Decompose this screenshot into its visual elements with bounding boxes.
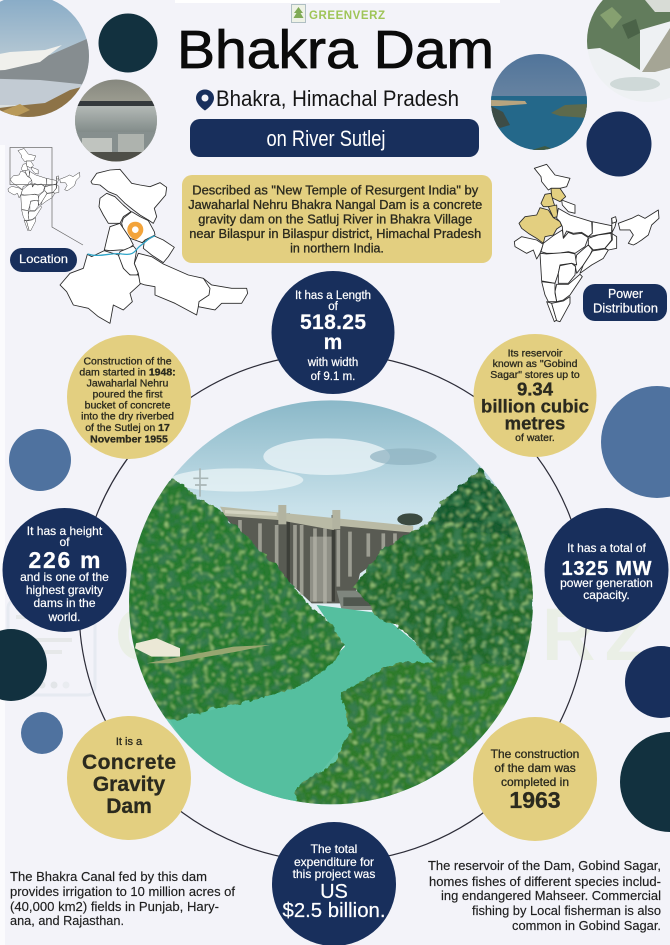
subtitle with location pin: Bhakra, Himachal Pradesh (216, 86, 459, 111)
info circle: dam type: Gravity (93, 773, 166, 796)
info circle: completion year: 1963 (509, 787, 561, 813)
text block: reservoir fishing: ing endangered Mahseer. Commercial (441, 889, 661, 903)
description box (182, 175, 492, 263)
power distribution label: Distribution (593, 302, 658, 316)
info circle: reservoir capacity: billion cubic (481, 396, 589, 416)
info circle: height: world. (47, 610, 81, 624)
info circle: construction start: poured the first (93, 388, 163, 400)
info circle: expenditure: The total (311, 842, 357, 856)
info circle: completion year (473, 717, 597, 841)
description box: gravity dam on the Satluj River in Bhakra Village (198, 212, 472, 226)
text block: reservoir fishing: fishing by Local fisherman is also (472, 904, 661, 918)
location label: Location (19, 252, 68, 266)
power distribution label (583, 284, 667, 321)
info circle: construction start: Construction of the (83, 356, 172, 368)
info circle: reservoir capacity: metres (505, 412, 565, 434)
photo: reservoir top right (491, 54, 587, 154)
photo: spillway water top right (587, 0, 670, 91)
icon: orange map pin (127, 222, 143, 240)
river line (88, 236, 155, 255)
info circle: reservoir capacity: Sagar" stores up to (490, 369, 580, 381)
text block: reservoir fishing: The reservoir of the Dam, Gobind Sagar, (428, 859, 661, 873)
photo: lake and clouds top left (0, 0, 89, 117)
info circle: power capacity: It has a total of (567, 541, 647, 555)
text block: irrigation: provides irrigation to 10 million acres of (10, 885, 236, 899)
info circle: completion year: completed in (501, 775, 569, 789)
description box: in northern India. (290, 242, 384, 256)
info circle: height: dams in the (33, 596, 96, 610)
text block: reservoir fishing: homes fishes of different species includ- (429, 875, 661, 889)
info circle: reservoir capacity (474, 334, 596, 457)
title: Bhakra Dam (177, 20, 494, 80)
info circle: length: m (324, 331, 342, 354)
info circle: height (2, 508, 126, 632)
info circle: power capacity: power generation (560, 576, 653, 590)
info circle: length: with width (307, 357, 358, 369)
info circle: length: 518.25 (300, 311, 366, 334)
watermark (8, 593, 650, 695)
info circle: height: and is one of the (20, 570, 109, 584)
info circle: expenditure: expenditure for (294, 855, 374, 869)
main photo: Bhakra Dam (120, 400, 540, 810)
info circle: height: highest gravity (26, 583, 103, 597)
description box: Jawaharlal Nehru Bhakra Nangal Dam is a concrete (188, 198, 482, 212)
info circle: dam type: It is a (116, 736, 143, 748)
info circle: length (272, 271, 394, 394)
text block: irrigation: (40,000 km2) fields in Punjab, Hary- (10, 900, 219, 914)
info circle: expenditure: this project was (293, 867, 375, 881)
map: India power distribution states (514, 164, 659, 322)
map: northern India (60, 169, 248, 323)
watermark: GREENVERZ (115, 593, 650, 676)
connecting ring (79, 354, 587, 862)
info circle: expenditure: $2.5 billion. (282, 900, 386, 922)
info circle: reservoir capacity: of water. (515, 432, 555, 444)
location label (10, 248, 77, 272)
text block: irrigation: The Bhakra Canal fed by this dam (10, 870, 207, 884)
info circle: power capacity (544, 508, 668, 632)
info circle: length: of (328, 301, 339, 313)
info circle: height: of (59, 535, 70, 549)
river banner (190, 119, 479, 157)
info circle: completion year: of the dam was (494, 761, 576, 775)
info circle: dam type (67, 716, 191, 840)
info circle: construction start (67, 335, 191, 459)
info circle: height: It has a height (27, 524, 103, 538)
river banner: on River Sutlej (266, 126, 386, 151)
power distribution label: Power (608, 287, 643, 301)
description box: near Bilaspur in Bilaspur district, Himachal Pradesh (189, 227, 481, 241)
photo: dam spillway (75, 79, 157, 163)
info circle: expenditure: US (320, 881, 348, 903)
info circle: length: of 9.1 m. (311, 371, 355, 383)
info circle: completion year: The construction (491, 747, 579, 761)
info circle: expenditure (272, 822, 396, 945)
inset map of India with zoom box (8, 148, 83, 245)
info circle: construction start: dam started in 1948: (79, 366, 176, 378)
text block: irrigation: ana, and Rajasthan. (10, 914, 124, 928)
info circle: reservoir capacity: known as "Gobind (493, 358, 578, 370)
info circle: power capacity: capacity. (583, 588, 630, 602)
info circle: length: It has a Length (295, 290, 371, 302)
info circle: dam type: Concrete (82, 751, 176, 774)
info circle: reservoir capacity: 9.34 (517, 378, 554, 400)
info circle: construction start: into the dry riverbed (81, 410, 174, 422)
logo (292, 4, 385, 22)
info circle: power capacity: 1325 MW (562, 558, 652, 580)
logo: GREENVERZ (309, 10, 385, 22)
info circle: height: 226 m (28, 547, 100, 573)
info circle: reservoir capacity: Its reservoir (508, 348, 563, 360)
info circle: construction start: of the Sutlej on 17 (85, 422, 170, 434)
info circle: construction start: bucket of concrete (85, 400, 171, 412)
info circle: construction start: November 1955 (90, 434, 168, 446)
description box: Described as "New Temple of Resurgent India" by (192, 184, 479, 198)
info circle: construction start: Jawaharlal Nehru (87, 378, 169, 390)
text block: reservoir fishing: common in Gobind Sagar. (512, 919, 661, 933)
info circle: dam type: Dam (106, 795, 152, 818)
